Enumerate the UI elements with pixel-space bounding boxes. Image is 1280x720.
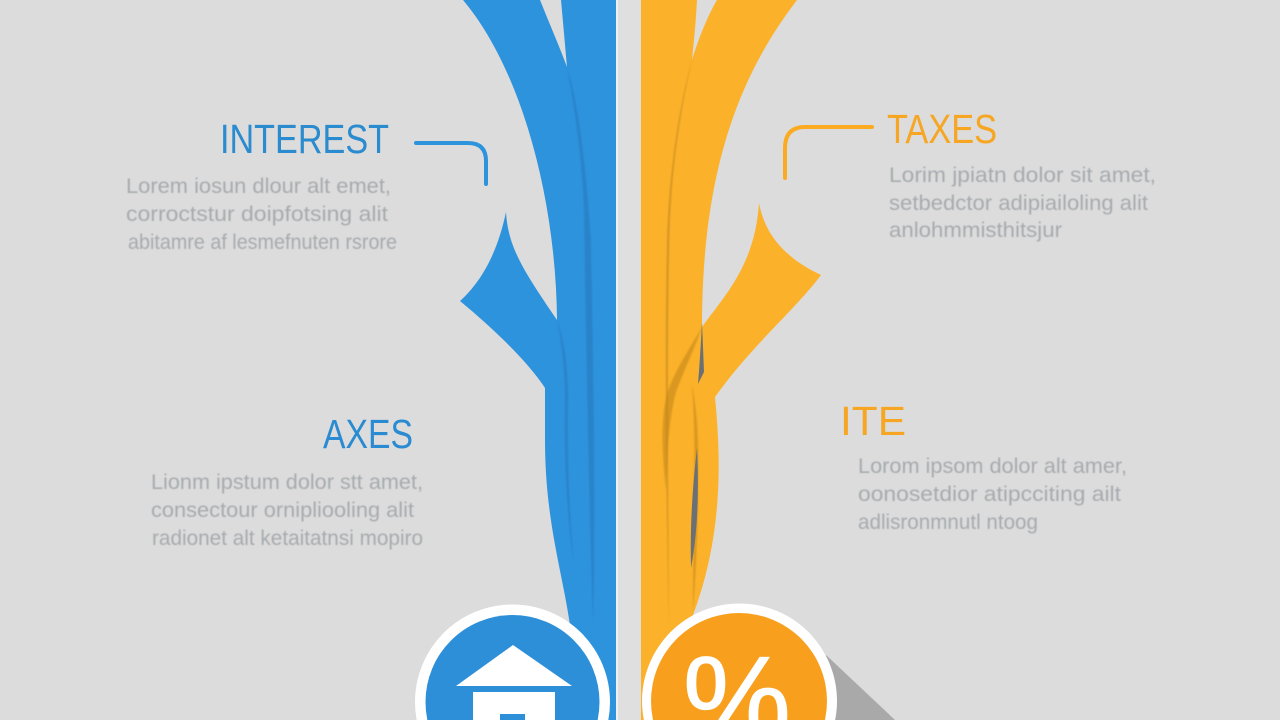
- orange badge shadow: [826, 655, 895, 720]
- connector: taxes: [785, 127, 872, 178]
- text block: axes: consectour ornipliooling alit: [151, 499, 414, 522]
- text block: interest: [126, 175, 397, 254]
- heading: ite: ITE: [840, 398, 906, 444]
- text block: taxes: setbedctor adipiailoling alit: [889, 192, 1148, 215]
- text block: interest: Lorem iosun dlour alt emet,: [126, 175, 391, 198]
- orange ribbons: [641, 0, 821, 720]
- connector: ite: [749, 416, 832, 420]
- blue ribbons: [460, 0, 616, 720]
- text block: axes: radionet alt ketaitatnsi mopiro: [152, 527, 423, 550]
- heading: axes: AXES: [323, 411, 413, 457]
- text block: axes: Lionm ipstum dolor stt amet,: [151, 471, 423, 494]
- text block: axes: [151, 471, 423, 550]
- icon: percent badge: [642, 604, 837, 720]
- text block: interest: corroctstur doipfotsing alit: [126, 203, 388, 226]
- text block: ite: adlisronmnutl ntoog: [858, 511, 1038, 534]
- text block: ite: oonosetdior atipcciting ailt: [858, 483, 1121, 506]
- heading: taxes: TAXES: [887, 106, 997, 152]
- text block: ite: Lorom ipsom dolor alt amer,: [858, 455, 1127, 478]
- text block: taxes: anlohmmisthitsjur: [889, 219, 1062, 242]
- text block: taxes: Lorim jpiatn dolor sit amet,: [889, 164, 1156, 187]
- dark slits between orange ribbons: [691, 322, 704, 568]
- text block: interest: abitamre af lesmefnuten rsrore: [128, 231, 397, 254]
- heading: interest: INTEREST: [220, 116, 389, 162]
- text block: taxes: [889, 164, 1156, 242]
- connector: interest: [416, 143, 486, 184]
- icon: house badge: [415, 604, 610, 720]
- text block: ite: [858, 455, 1127, 534]
